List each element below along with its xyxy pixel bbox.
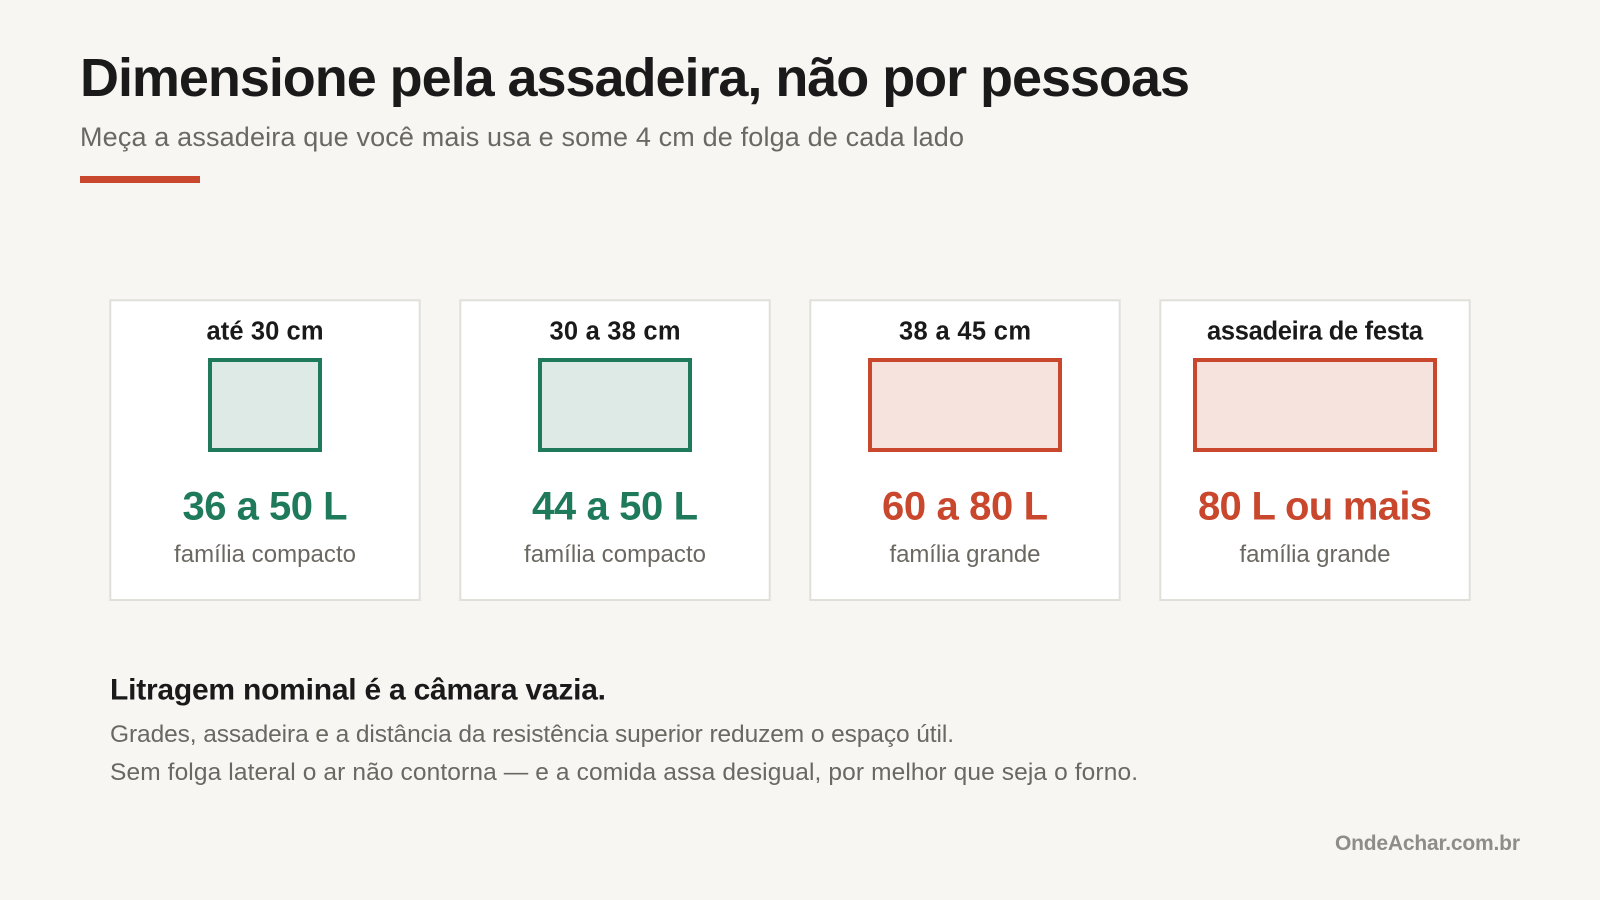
panel: assadeira de festa bbox=[1160, 300, 1470, 600]
family: família compacto bbox=[174, 541, 356, 568]
note line 2: Sem folga lateral o ar não contorna — e a comida assa desigual, por melhor que seja o forno. bbox=[110, 759, 1138, 786]
panel: até 30 cm bbox=[110, 300, 420, 600]
pan rectangle bbox=[870, 360, 1060, 450]
size label: até 30 cm bbox=[206, 318, 324, 346]
accent bar bbox=[80, 176, 200, 183]
source footer: OndeAchar.com.br bbox=[1335, 832, 1520, 855]
pan rectangle bbox=[210, 360, 320, 450]
volume: 80 L ou mais bbox=[1198, 484, 1432, 528]
size label: 30 a 38 cm bbox=[550, 318, 680, 346]
title: Dimensione pela assadeira, não por pessoas bbox=[80, 48, 1190, 108]
note block bbox=[110, 674, 1138, 786]
volume: 36 a 50 L bbox=[182, 484, 348, 528]
volume: 60 a 80 L bbox=[882, 484, 1048, 528]
family: família grande bbox=[890, 541, 1040, 568]
family: família compacto bbox=[524, 541, 706, 568]
subtitle: Meça a assadeira que você mais usa e some 4 cm de folga de cada lado bbox=[80, 122, 964, 152]
note line 1: Grades, assadeira e a distância da resistência superior reduzem o espaço útil. bbox=[110, 721, 954, 748]
family: família grande bbox=[1240, 541, 1390, 568]
panel: 38 a 45 cm bbox=[810, 300, 1120, 600]
panel: 30 a 38 cm bbox=[460, 300, 770, 600]
pan rectangle bbox=[540, 360, 690, 450]
note heading: Litragem nominal é a câmara vazia. bbox=[110, 674, 606, 706]
size label: assadeira de festa bbox=[1207, 318, 1424, 346]
pan rectangle bbox=[1195, 360, 1435, 450]
size label: 38 a 45 cm bbox=[899, 318, 1031, 346]
header bbox=[80, 48, 1190, 183]
volume: 44 a 50 L bbox=[532, 484, 698, 528]
